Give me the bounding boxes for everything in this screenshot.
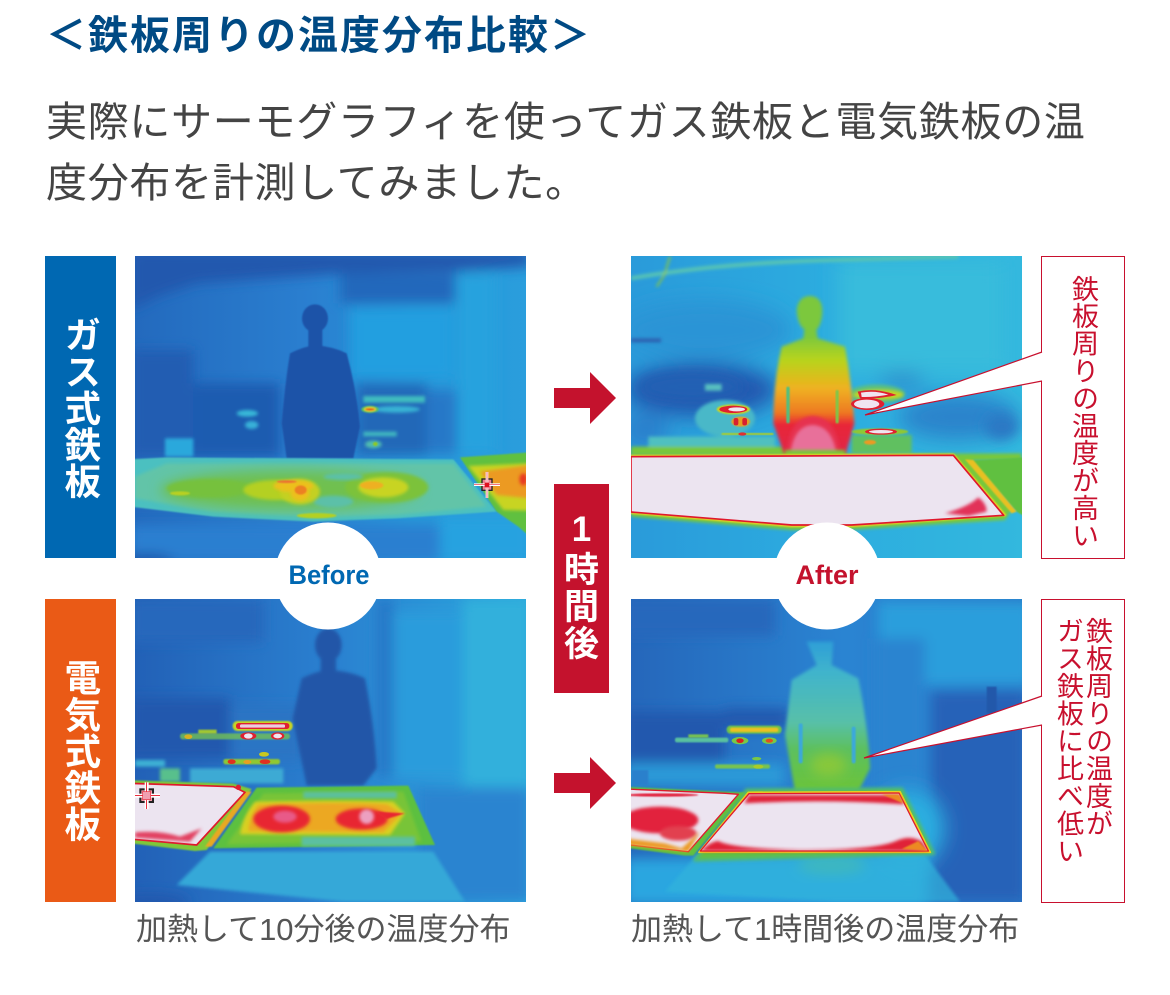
callout pointer: gas griddle — [864, 352, 1042, 416]
label: gas griddle: ガス式鉄板 — [59, 316, 100, 498]
thermal image: electric griddle after — [631, 599, 1022, 902]
adjacent griddle — [130, 780, 252, 851]
badge: After: After — [796, 560, 859, 590]
badge: Before — [278, 522, 378, 630]
caption: 10 minutes: 加熱して10分後の温度分布 — [136, 912, 511, 947]
callout pointer: electric griddle — [864, 696, 1042, 759]
arrow: top — [554, 372, 616, 424]
person silhouette — [293, 628, 377, 893]
title: ＜鉄板周りの温度分布比較＞ — [46, 14, 592, 58]
callout: gas griddle — [1041, 256, 1125, 559]
adjacent griddle — [460, 452, 530, 537]
label: gas griddle — [45, 256, 116, 558]
arrow: bottom — [554, 757, 616, 809]
label: one hour later: 1 — [572, 510, 591, 549]
callout: electric griddle — [1041, 599, 1125, 903]
hot spots — [717, 390, 908, 445]
callout text: 鉄板周りの温度が高い — [1068, 275, 1098, 549]
hot spots — [675, 726, 782, 769]
hot spots — [180, 721, 293, 764]
label: one hour later: 間 — [564, 588, 599, 627]
label: one hour later: 後 — [564, 625, 599, 664]
callout text column 1: 鉄板周りの温度が — [1082, 617, 1112, 837]
caption: 1 hour: 加熱して1時間後の温度分布 — [631, 912, 1019, 947]
intro text — [46, 99, 1086, 206]
griddle surface — [213, 786, 435, 848]
adjacent griddle — [622, 787, 745, 856]
badge: Before: Before — [288, 560, 370, 590]
label: one hour later — [554, 484, 609, 693]
person silhouette — [773, 296, 854, 457]
thermal image: gas griddle after — [631, 256, 1022, 558]
thermal image: electric griddle before — [135, 599, 526, 902]
griddle surface — [130, 457, 497, 522]
person silhouette — [785, 642, 870, 875]
crosshair marker — [133, 782, 160, 809]
griddle surface — [631, 450, 1025, 530]
intro text: 実際にサーモグラフィを使ってガス鉄板と電気鉄板の温 — [46, 99, 1086, 145]
crosshair marker — [474, 472, 500, 498]
label: electric griddle — [45, 599, 116, 902]
intro text: 度分布を計測してみました。 — [46, 160, 587, 206]
label: one hour later: 時 — [564, 551, 599, 590]
thermal image: gas griddle before — [135, 256, 526, 558]
callout text column 2: ガス鉄板に比べ低い — [1053, 617, 1083, 864]
griddle surface — [695, 789, 933, 860]
badge: After — [776, 522, 878, 630]
label: electric griddle: 電気式鉄板 — [59, 659, 100, 842]
